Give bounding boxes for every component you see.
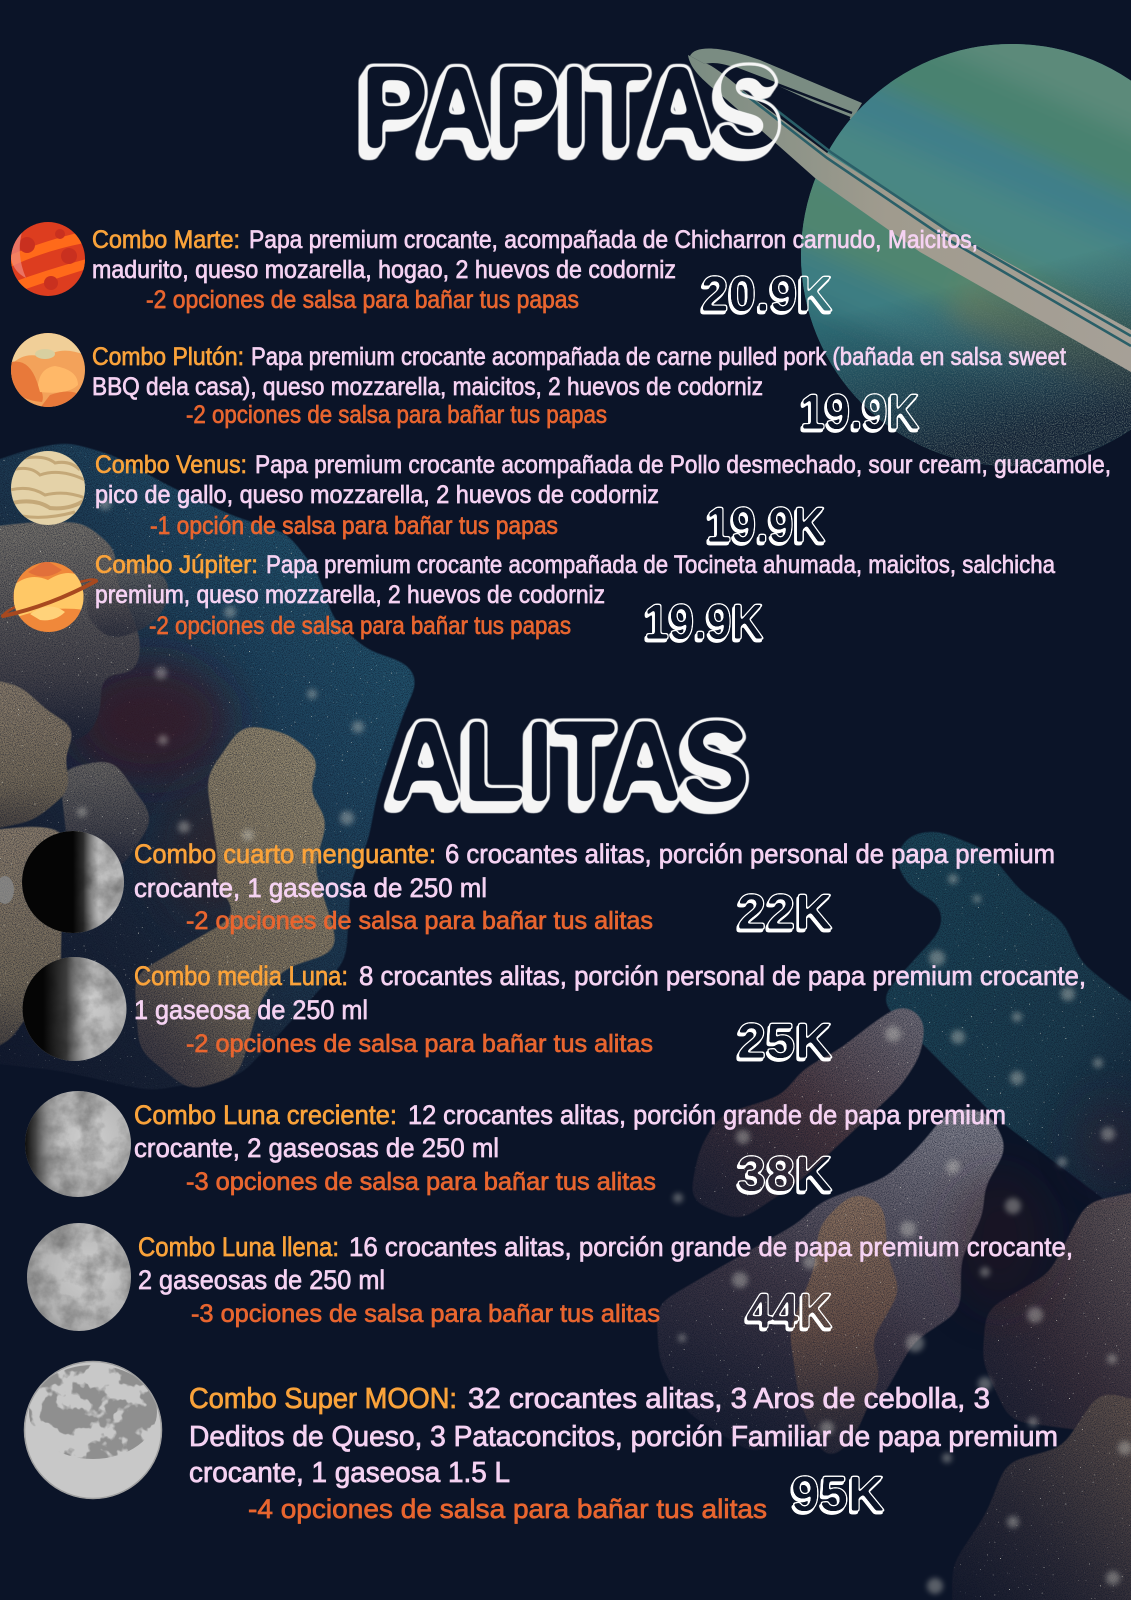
heading: PAPITAS: PAPITAS: [361, 42, 782, 174]
price: 38K: 38K: [737, 1146, 833, 1202]
text: combo super moon: [189, 1383, 1058, 1524]
icon: full moon: [24, 1361, 162, 1499]
text: combo luna llena: 2 gaseosas de 250 ml: [138, 1265, 385, 1295]
text: combo cuarto menguante: crocante, 1 gaseosa de 250 ml: [134, 873, 487, 903]
icon: moon half: [22, 957, 126, 1061]
combo venus: [10, 451, 1111, 553]
illustration: ringed planet: [688, 44, 1131, 466]
nebula: right cloud: [657, 831, 1131, 1600]
text: combo cuarto menguante: [134, 839, 1055, 935]
text: combo pluton: [92, 343, 1066, 429]
text: combo super moon: Combo Super MOON:: [189, 1383, 457, 1415]
text: combo luna creciente: -3 opciones de salsa para bañar tus alitas: [186, 1168, 656, 1196]
icon: moon nearly full: [27, 1223, 131, 1331]
combo luna creciente: [25, 1091, 1006, 1202]
text: combo cuarto menguante: Combo cuarto menguante:: [134, 839, 436, 869]
combo luna llena: [27, 1223, 1073, 1339]
text: combo media luna: 8 crocantes alitas, porción personal de papa premium crocante,: [359, 961, 1086, 991]
text: combo super moon: crocante, 1 gaseosa 1.5 L: [189, 1457, 510, 1489]
text: combo luna llena: -3 opciones de salsa para bañar tus alitas: [191, 1300, 660, 1328]
text: combo jupiter: [95, 551, 1055, 640]
text: combo marte: Combo Marte:: [92, 226, 240, 254]
price: 22K: 22K: [737, 884, 833, 940]
text: combo luna llena: Combo Luna llena:: [138, 1232, 339, 1262]
text: combo venus: Combo Venus:: [95, 451, 247, 479]
stars: [77, 498, 1131, 1594]
icon: moon waning quarter: [22, 831, 124, 933]
planet body: [801, 44, 1131, 466]
combo media luna: [22, 957, 1086, 1069]
heading: ALITAS: ALITAS: [389, 698, 750, 826]
text: combo pluton: -2 opciones de salsa para bañar tus papas: [186, 401, 607, 429]
text: combo jupiter: Combo Júpiter:: [95, 551, 258, 579]
text: combo super moon: Deditos de Queso, 3 Pataconcitos, porción Familiar de papa premium: [189, 1421, 1058, 1453]
text: combo marte: madurito, queso mozarella, hogao, 2 huevos de codorniz: [92, 256, 676, 284]
text: combo pluton: Combo Plutón:: [92, 343, 244, 371]
combo marte: [8, 222, 978, 322]
price: 95K: 95K: [791, 1466, 885, 1522]
price: 44K: 44K: [746, 1283, 833, 1339]
text: combo venus: pico de gallo, queso mozzarella, 2 huevos de codorniz: [95, 481, 659, 509]
text: combo luna llena: 16 crocantes alitas, porción grande de papa premium crocante,: [349, 1232, 1073, 1262]
text: combo luna creciente: [134, 1100, 1006, 1196]
text: combo marte: [92, 226, 978, 314]
panel: papitas combos: [2, 222, 1111, 650]
text: combo luna llena: [138, 1232, 1073, 1328]
text: combo media luna: [134, 961, 1086, 1058]
price: 19.9K: 19.9K: [800, 384, 920, 440]
text: combo luna creciente: Combo Luna creciente:: [134, 1100, 397, 1130]
text: combo jupiter: premium, queso mozzarella, 2 huevos de codorniz: [95, 581, 605, 609]
icon: planet pluto: [10, 333, 85, 408]
icon: planet jupiter: [2, 560, 97, 632]
combo jupiter: [2, 551, 1055, 650]
price: 19.9K: 19.9K: [706, 497, 826, 553]
combo super moon: [24, 1361, 1058, 1524]
combo pluton: [10, 333, 1066, 440]
text: combo marte: -2 opciones de salsa para bañar tus papas: [146, 286, 579, 314]
nebula: left cloud: [0, 443, 418, 1090]
text: combo cuarto menguante: -2 opciones de salsa para bañar tus alitas: [186, 907, 653, 935]
text: combo luna creciente: 12 crocantes alitas, porción grande de papa premium: [408, 1100, 1006, 1130]
icon: planet mars: [8, 222, 90, 296]
panel: alitas combos: [22, 831, 1086, 1524]
text: combo venus: [95, 451, 1111, 540]
text: combo super moon: -4 opciones de salsa para bañar tus alitas: [248, 1494, 767, 1524]
text: combo media luna: 1 gaseosa de 250 ml: [134, 995, 368, 1025]
text: combo media luna: Combo media Luna:: [134, 961, 348, 991]
price: 25K: 25K: [737, 1013, 833, 1069]
text: combo pluton: BBQ dela casa), queso mozzarella, maicitos, 2 huevos de codorniz: [92, 373, 763, 401]
text: combo super moon: 32 crocantes alitas, 3 Aros de cebolla, 3: [468, 1383, 990, 1415]
text: combo jupiter: Papa premium crocante acompañada de Tocineta ahumada, maicitos, salchicha: [266, 551, 1055, 579]
icon: planet venus: [10, 451, 85, 525]
icon: moon waxing: [25, 1091, 131, 1197]
text: combo marte: Papa premium crocante, acompañada de Chicharron carnudo, Maicitos,: [249, 226, 978, 254]
text: combo cuarto menguante: 6 crocantes alitas, porción personal de papa premium: [445, 839, 1055, 869]
price: 19.9K: 19.9K: [644, 594, 764, 650]
ring: back branch: [690, 48, 862, 120]
text: combo venus: -1 opción de salsa para bañar tus papas: [150, 512, 558, 540]
text: combo media luna: -2 opciones de salsa para bañar tus alitas: [186, 1030, 653, 1058]
text: combo jupiter: -2 opciones de salsa para bañar tus papas: [149, 612, 571, 640]
price: 20.9K: 20.9K: [701, 266, 833, 322]
combo cuarto menguante: [22, 831, 1055, 940]
text: combo luna creciente: crocante, 2 gaseosas de 250 ml: [134, 1133, 499, 1163]
ring: front branch: [688, 55, 1131, 372]
